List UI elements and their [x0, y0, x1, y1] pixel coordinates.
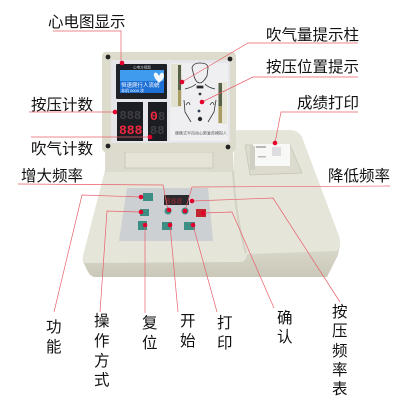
button: rate up [164, 208, 172, 214]
label: operation mode [94, 312, 110, 389]
label: compression position: 按压位置提示 [266, 58, 359, 76]
label: print: 印 [217, 334, 233, 352]
label: start: 开 [180, 313, 196, 330]
ECG display: 心电方视图 [133, 64, 151, 70]
label: operation mode: 作 [94, 332, 110, 350]
ECG display [116, 64, 167, 99]
label: print score: 成绩打印 [297, 94, 359, 112]
button: reset [138, 221, 147, 230]
label: compression rate meter: 压 [332, 323, 348, 340]
label: reset [142, 314, 158, 352]
label: start: 始 [180, 332, 196, 350]
airflow bar right [218, 82, 227, 124]
label: decrease rate: 降低频率 [328, 167, 390, 185]
label: print: 打 [217, 314, 233, 332]
label: confirm: 确 [277, 309, 293, 327]
label: print [217, 314, 233, 352]
label: compression rate meter: 频 [332, 342, 348, 360]
button: mode [140, 209, 149, 216]
label: reset: 位 [142, 334, 158, 352]
label: airflow column: 吹气量提示柱 [266, 26, 359, 44]
label: function [46, 318, 62, 356]
printer [245, 144, 302, 175]
label: function: 功 [46, 318, 62, 336]
label: ECG display: 心电图显示 [48, 13, 126, 31]
button: confirm [196, 209, 206, 217]
display lid: 便携式半自动心肺复苏模拟人 [175, 130, 227, 136]
button: start [162, 222, 172, 230]
label: compression count: 按压计数 [31, 96, 94, 114]
label: ventilation count: 吹气计数 [31, 140, 94, 158]
button: function [143, 193, 153, 201]
label: compression rate meter: 按 [332, 303, 348, 321]
lid hinge [105, 150, 233, 172]
label: compression rate meter: 表 [332, 380, 348, 398]
label: confirm: 认 [277, 328, 293, 346]
label: reset: 复 [142, 314, 158, 332]
CPR torso diagram [184, 63, 216, 122]
control panel [119, 188, 213, 241]
label: compression rate meter: 率 [332, 361, 348, 379]
ventilation counter panel: 0 [150, 109, 158, 124]
label: increase rate: 增大频率 [21, 167, 83, 185]
ECG display: 本机 0000 次 [121, 87, 144, 93]
airflow bar left [171, 64, 182, 107]
label: confirm [277, 309, 293, 346]
ventilation counter panel: 88 [150, 124, 164, 138]
compression counter panel: 888 [120, 109, 141, 123]
label: start [180, 313, 196, 350]
ventilation counter panel [148, 102, 167, 141]
button: print [184, 222, 195, 230]
ventilation counter panel: 8 [158, 110, 165, 124]
control panel: 888 [165, 196, 182, 207]
compression counter panel [117, 102, 143, 141]
label: function: 能 [46, 338, 62, 356]
label: operation mode: 操 [94, 312, 110, 330]
callout dots [113, 61, 277, 227]
label: operation mode: 方 [94, 352, 110, 370]
button: rate down [182, 208, 188, 214]
ECG display: 恒速爬行人流统 [121, 81, 160, 89]
compression counter panel: 888 [119, 123, 143, 138]
device base [83, 130, 340, 277]
callout lines [18, 31, 390, 313]
label: operation mode: 式 [94, 371, 110, 389]
label: compression rate meter [332, 303, 348, 398]
display lid [102, 52, 236, 152]
